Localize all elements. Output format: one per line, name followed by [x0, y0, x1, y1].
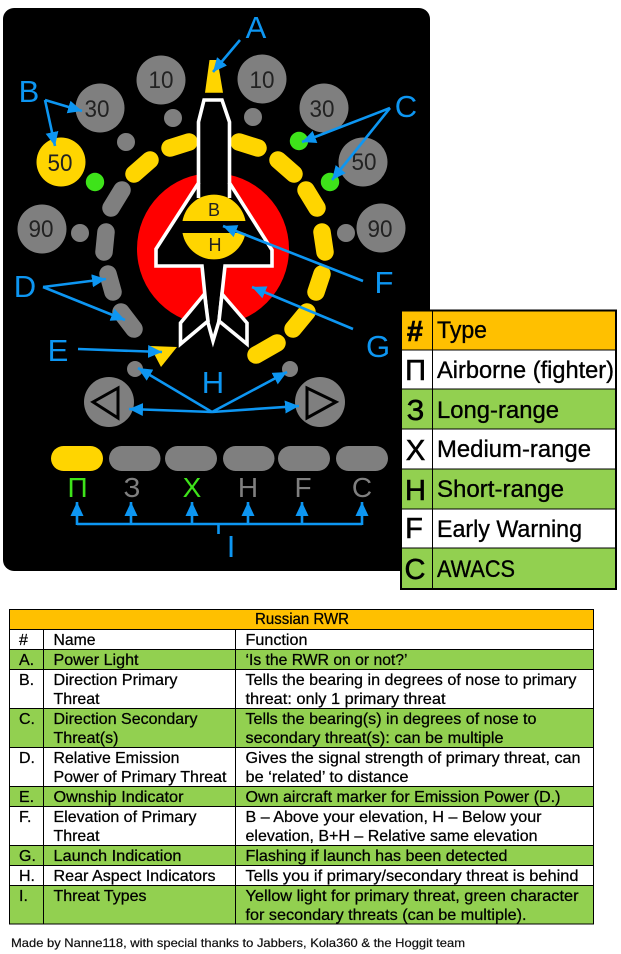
- threat type table: З: [407, 395, 424, 427]
- column: functions: Own aircraft marker for Emission Power (D.): [246, 789, 560, 806]
- column: letters: A.: [19, 652, 34, 669]
- column: functions: ‘Is the RWR on or not?’: [246, 652, 408, 669]
- aircraft outline: [156, 100, 272, 344]
- threat type table: Н: [405, 475, 426, 507]
- threat type table: Early Warning: [437, 516, 582, 543]
- column: functions: Tells the bearing in degrees of nose to primary: [246, 672, 576, 689]
- callout F: F: [375, 265, 393, 300]
- Russian RWR table: [10, 610, 594, 924]
- callout B: [19, 74, 82, 146]
- elevation indicators: H: [208, 235, 222, 255]
- callout D: [14, 269, 125, 320]
- column: functions: threat: only 1 primary threat: [246, 691, 446, 708]
- callout A: A: [246, 10, 267, 45]
- column: names: Threat(s): [54, 730, 118, 747]
- threat type characters: П: [67, 472, 88, 503]
- table row fills: [10, 610, 594, 924]
- bearing lamps: 90: [368, 216, 392, 243]
- callout G: [252, 287, 390, 364]
- credits footer: Made by Nanne118, with special thanks to Jabbers, Kola360 & the Hoggit team: [11, 936, 465, 950]
- column: letters: I.: [19, 888, 28, 905]
- column: names: Direction Secondary: [54, 711, 198, 728]
- threat type characters: Х: [183, 472, 202, 503]
- elevation indicators: [182, 195, 246, 259]
- callout D: D: [14, 269, 36, 304]
- column: names: Threat Types: [54, 888, 146, 905]
- column: names: Launch Indication: [54, 848, 182, 865]
- column: functions: elevation, B+H – Relative same elevation: [246, 828, 538, 845]
- threat type table: Long-range: [437, 397, 559, 424]
- threat type table: Medium-range: [437, 436, 591, 463]
- elevation indicators: B: [208, 200, 220, 220]
- callout H: H: [202, 365, 224, 400]
- bearing lamps: 50: [48, 150, 72, 177]
- column: functions: Gives the signal strength of primary threat, can: [246, 750, 580, 767]
- column: names: [54, 632, 227, 905]
- bearing lamps: 50: [352, 149, 376, 176]
- column: letters: G.: [19, 848, 36, 865]
- callout C: C: [395, 89, 417, 124]
- power light: [205, 60, 223, 93]
- callout H: [129, 365, 299, 412]
- column: letters: [19, 632, 36, 905]
- column: names: Power Light: [54, 652, 139, 669]
- bearing lamps: 10: [148, 67, 174, 94]
- callout I: [77, 502, 362, 564]
- column: functions: Flashing if launch has been detected: [246, 848, 508, 865]
- callout E: E: [48, 333, 68, 368]
- threat type characters: З: [124, 472, 140, 503]
- column: functions: Tells you if primary/secondary threat is behind: [246, 868, 578, 885]
- callout A: [213, 10, 267, 72]
- bearing lamps: 90: [28, 216, 54, 243]
- column: letters: #: [19, 632, 28, 649]
- threat type table: F: [405, 513, 423, 545]
- column: letters: B.: [19, 672, 34, 689]
- threat type table: П: [405, 355, 426, 387]
- threat type table: Airborne (fighter): [437, 357, 614, 384]
- bearing lamps: 10: [250, 67, 274, 94]
- table title: Russian RWR: [255, 611, 349, 628]
- threat type characters: С: [352, 472, 372, 503]
- column: names: Rear Aspect Indicators: [54, 868, 216, 885]
- column: names: Power of Primary Threat: [54, 769, 227, 786]
- column: names: Direction Primary: [54, 672, 178, 689]
- small indicator dots: [71, 108, 355, 242]
- ownship indicator: [150, 346, 177, 367]
- column: names: Name: [54, 632, 96, 649]
- column: functions: Function: [246, 632, 308, 649]
- column: functions: [246, 632, 580, 924]
- bearing lamps: [18, 54, 406, 254]
- column: functions: be ‘related’ to distance: [246, 769, 409, 786]
- threat type characters: F: [294, 472, 312, 503]
- threat type table: AWACS: [437, 556, 515, 583]
- threat type table: [401, 310, 616, 589]
- callout B: B: [19, 74, 39, 109]
- column: functions: for secondary threats (can be multiple).: [246, 907, 526, 924]
- panel: RWR display: [3, 8, 430, 571]
- column: names: Threat: [54, 691, 100, 708]
- threat type table: Type: [437, 317, 487, 344]
- column: names: Threat: [54, 828, 100, 845]
- callout C: [302, 89, 417, 180]
- bearing lamps: 30: [84, 96, 110, 123]
- column: letters: H.: [19, 868, 35, 885]
- threat type table: Х: [406, 435, 425, 467]
- threat type table: С: [405, 554, 425, 586]
- column: functions: B – Above your elevation, H – Below your: [246, 809, 542, 826]
- emission power arc segments: [104, 132, 325, 355]
- bearing lamps: 30: [310, 96, 334, 123]
- column: names: Ownship Indicator: [54, 789, 184, 806]
- threat type table: Short-range: [437, 476, 564, 503]
- threat type table: #: [407, 316, 423, 348]
- callout E: [48, 333, 162, 368]
- rear aspect indicators: [84, 361, 345, 427]
- launch indication red circle: [137, 173, 289, 325]
- column: names: Relative Emission: [54, 750, 180, 767]
- column: letters: F.: [19, 809, 31, 826]
- column: functions: Tells the bearing(s) in degrees of nose to: [246, 711, 537, 728]
- column: names: Elevation of Primary: [54, 809, 196, 826]
- column: functions: Yellow light for primary threat, green character: [246, 888, 579, 905]
- column: letters: E.: [19, 789, 34, 806]
- callout F: [223, 226, 393, 300]
- column: letters: C.: [19, 711, 35, 728]
- threat type characters: [67, 472, 372, 503]
- callout I: I: [227, 529, 235, 564]
- column: functions: secondary threat(s): can be multiple: [246, 730, 504, 747]
- callout G: G: [366, 329, 390, 364]
- column: letters: D.: [19, 750, 35, 767]
- threat type lights: [51, 446, 388, 471]
- threat type characters: Н: [238, 472, 258, 503]
